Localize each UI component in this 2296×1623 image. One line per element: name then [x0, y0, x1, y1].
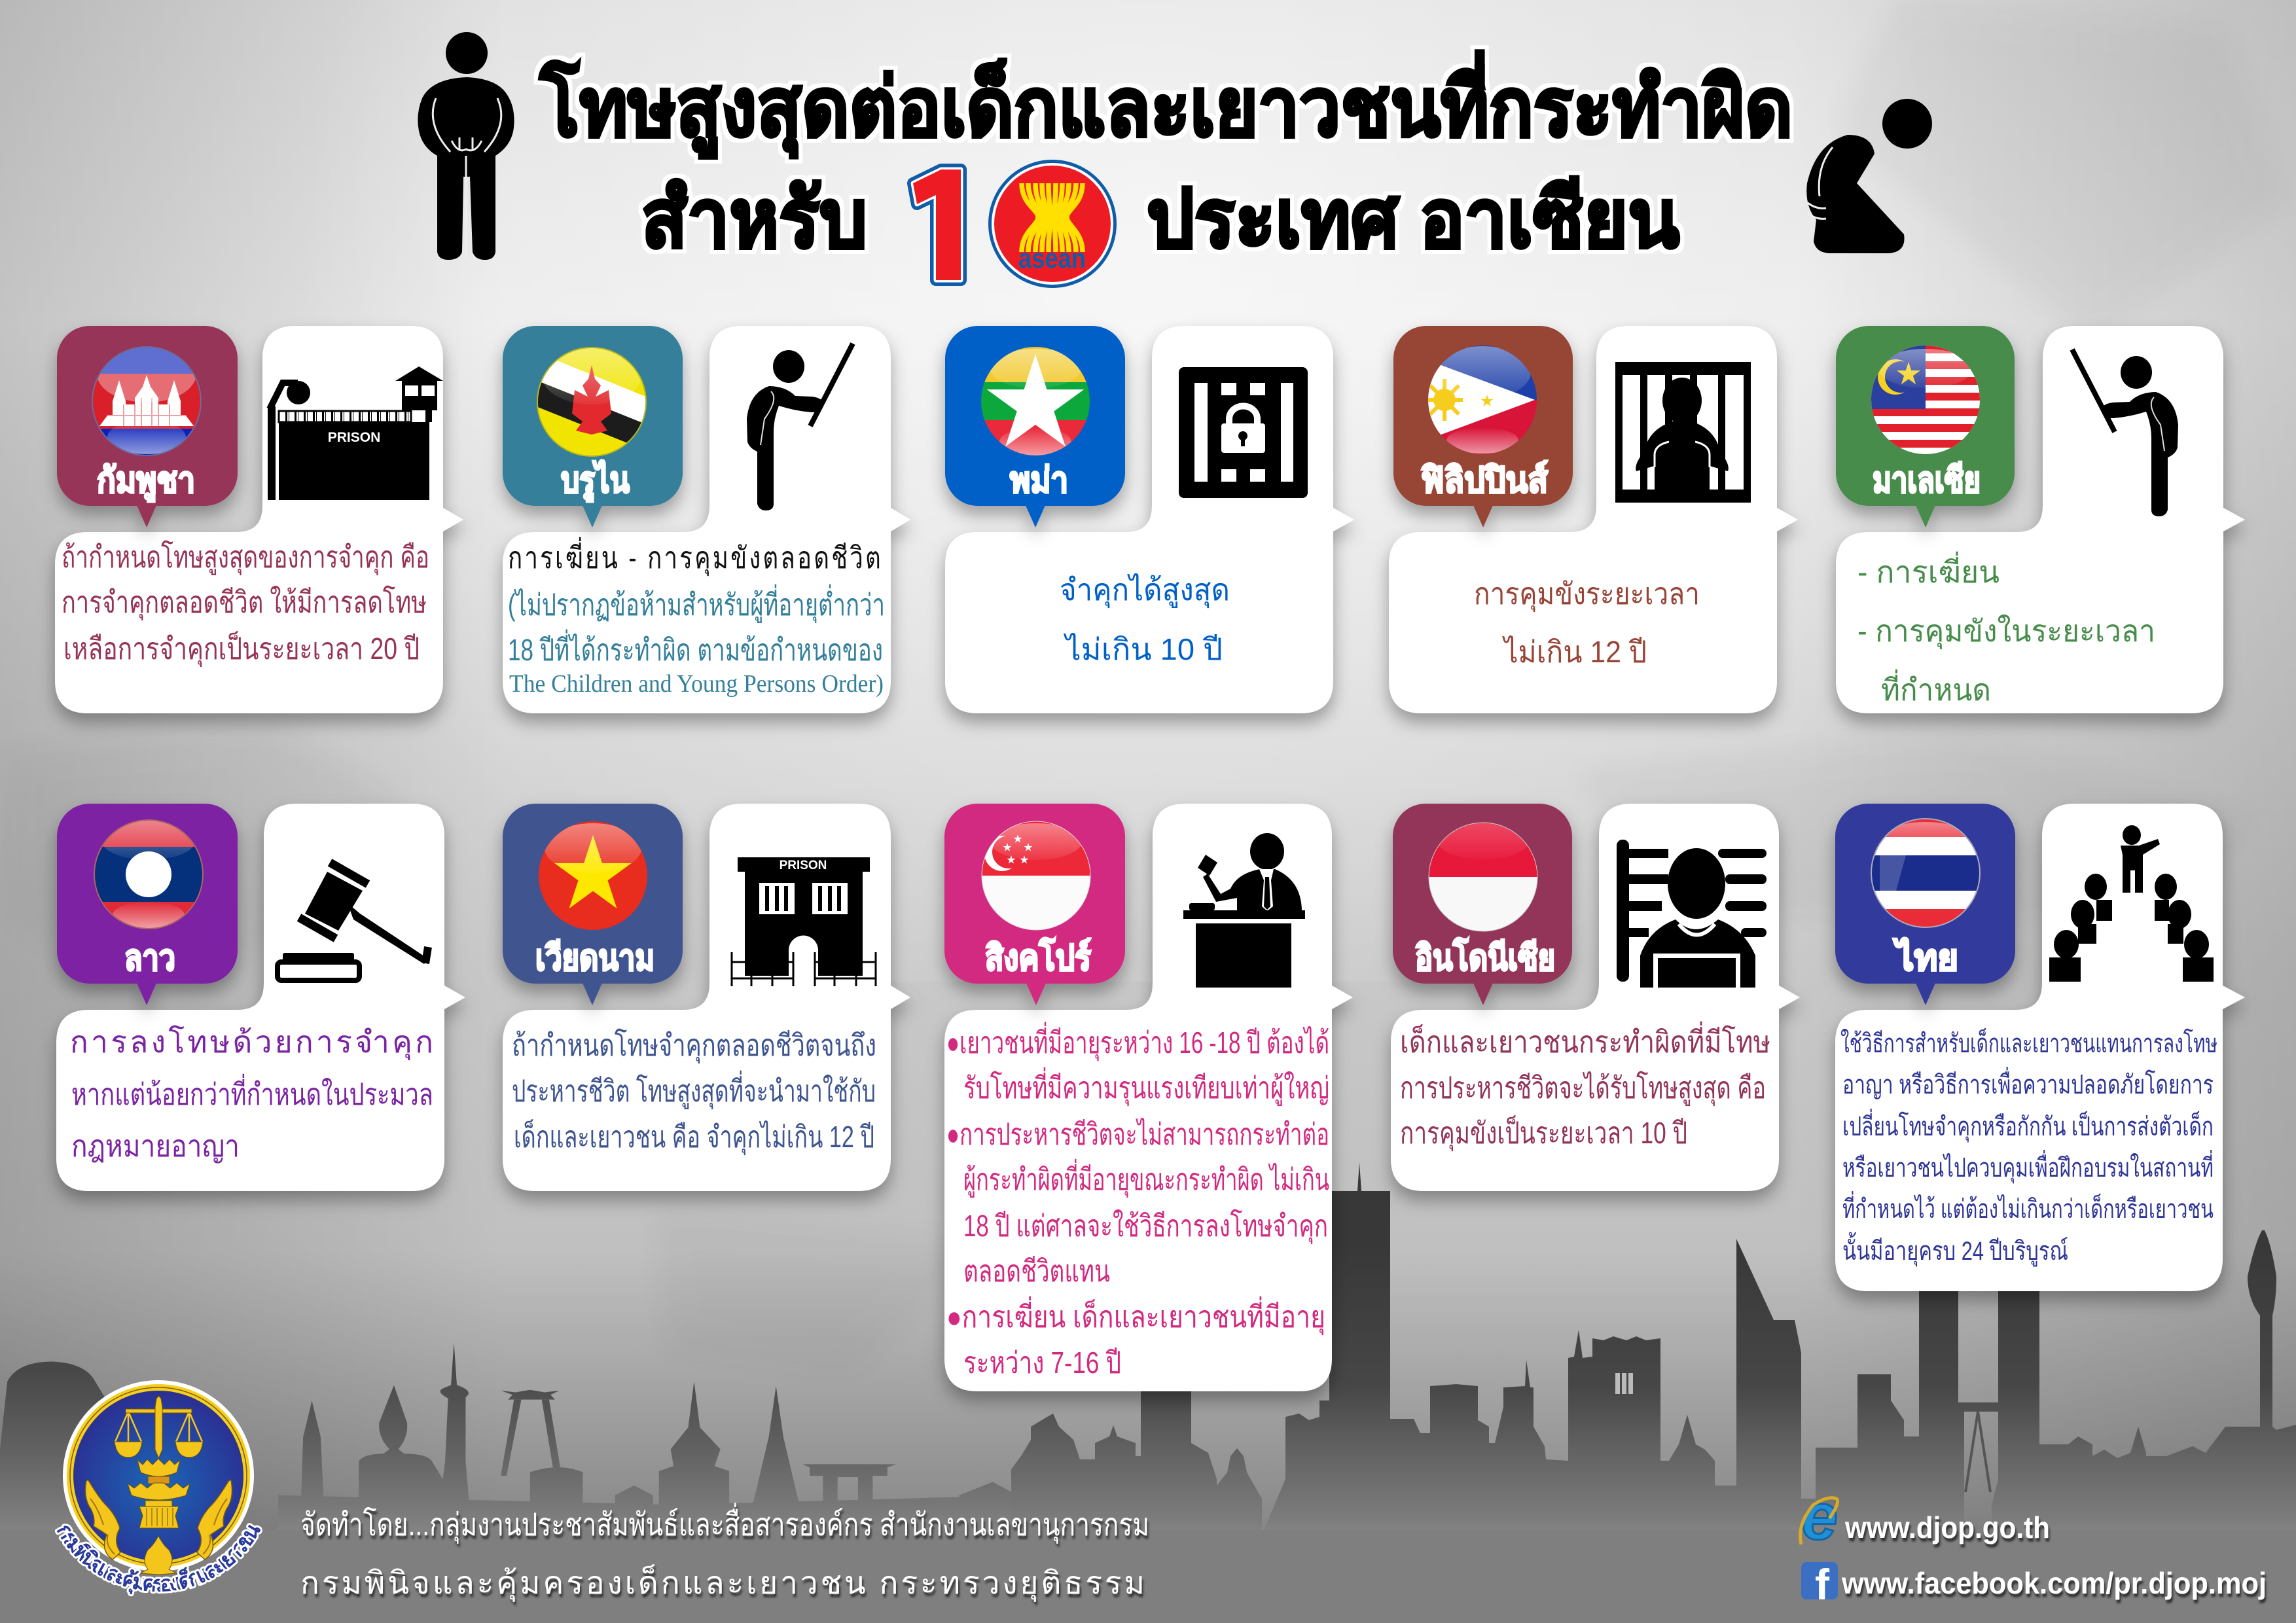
penalty text: การคุมขังระยะเวลา: [1474, 577, 1700, 613]
penalty text: เด็กและเยาวชน คือ จำคุกไม่เกิน 12 ปี: [514, 1119, 874, 1156]
icon: facebook: [1801, 1560, 1838, 1609]
title: โทษสูงสุดต่อเด็กและเยาวชนที่กระทำผิด: [539, 50, 1793, 158]
country tag: [1835, 804, 2015, 1005]
ASEAN emblem: [988, 160, 1117, 288]
icon: group with instructor: [2049, 825, 2214, 982]
title: สำหรับ: [641, 174, 867, 264]
penalty text: นั้นมีอายุครบ 24 ปีบริบูรณ์: [1842, 1232, 2068, 1267]
flag: Vietnam: [539, 821, 647, 930]
white bubble: [1391, 804, 1800, 1191]
country tag: [57, 804, 238, 1005]
panel: Cambodia: [55, 326, 463, 713]
flag: Philippines: [1424, 346, 1537, 454]
country name: กัมพูชา: [97, 461, 195, 502]
panel: Singapore: [944, 804, 1353, 1391]
penalty text: [1400, 1021, 1770, 1152]
penalty text: 18 ปี แต่ศาลจะใช้วิธีการลงโทษจำคุก: [963, 1209, 1328, 1245]
flag: Cambodia: [92, 345, 201, 455]
country name: เวียดนาม: [535, 938, 655, 978]
icon: prison wall: [268, 366, 443, 500]
penalty text: การประหารชีวิตจะได้รับโทษสูงสุด คือ: [1400, 1071, 1766, 1107]
country tag: [1393, 804, 1572, 1005]
penalty text: The Children and Young Persons Order): [509, 670, 884, 698]
penalty text: ถ้ากำหนดโทษจำคุกตลอดชีวิตจนถึง: [512, 1028, 876, 1064]
penalty text: ตลอดชีวิตแทน: [963, 1254, 1110, 1288]
department name ribbon: กรมพินิจและคุ้มครองเด็กและเยาวชน: [55, 1523, 262, 1597]
white bubble: [1836, 326, 2245, 713]
icon: web browser: e: [1801, 1480, 1838, 1554]
penalty text: [1840, 1027, 2217, 1267]
penalty text: ไม่เกิน 12 ปี: [1501, 635, 1647, 669]
footer: organization credits: กรมพินิจและคุ้มครองเด็กและเยาวชน กระทรวงยุติธรรม: [300, 1564, 1145, 1602]
icon: judge at bench: [1183, 833, 1305, 988]
country tag: [1393, 326, 1573, 527]
flag: Thailand: [1871, 819, 1980, 927]
penalty text: [62, 540, 429, 668]
panel: Thailand: [1835, 804, 2245, 1291]
footer: organization credits: จัดทำโดย...กลุ่มงานประชาสัมพันธ์และสื่อสารองค์กร สำนักงานเลขานุการกรม: [300, 1503, 1149, 1544]
icon: man with cane: [747, 344, 853, 510]
flag: Brunei: [533, 347, 651, 456]
icon: man with cane: [2072, 349, 2178, 516]
icon: gavel: [278, 863, 428, 980]
country name: มาเลเซีย: [1873, 461, 1981, 500]
icon: prison building: [732, 857, 876, 986]
penalty text: ระหว่าง 7-16 ปี: [963, 1346, 1121, 1380]
country tag: [503, 326, 683, 527]
country name: ลาว: [124, 938, 175, 978]
icon: prison building: PRISON: [780, 859, 827, 872]
white bubble: [1389, 326, 1798, 713]
flag: Laos: [94, 820, 203, 929]
penalty text: [1857, 551, 2155, 707]
penalty text: จำคุกได้สูงสุด: [1060, 573, 1230, 609]
white bubble: [56, 804, 465, 1191]
penalty text: [1474, 577, 1700, 669]
scales of justice: [115, 1396, 203, 1458]
penalty text: ไม่เกิน 10 ปี: [1063, 632, 1223, 666]
penalty text: - การเฆี่ยน: [1857, 551, 2000, 589]
country tag: [1836, 326, 2015, 527]
icon: person behind bars: [1615, 362, 1751, 503]
panel: Myanmar: [945, 326, 1354, 713]
country name: อินโดนีเซีย: [1415, 937, 1555, 978]
penalty text: กฎหมายอาญา: [71, 1129, 240, 1163]
country name: พม่า: [1010, 461, 1068, 500]
website address: www.djop.go.th: [1844, 1510, 2050, 1544]
white bubble: [55, 326, 463, 713]
penalty text: การลงโทษด้วยการจำคุก: [70, 1025, 433, 1061]
penalty text: ที่กำหนด: [1881, 669, 1991, 707]
penalty text: [512, 1028, 876, 1156]
penalty text: (ไม่ปรากฏข้อห้ามสำหรับผู้ที่อายุต่ำกว่า: [508, 584, 885, 624]
penalty text: ประหารชีวิต โทษสูงสุดที่จะนำมาใช้กับ: [512, 1070, 876, 1110]
icon: prison wall: PRISON: [328, 430, 380, 445]
white bubble: [945, 326, 1354, 713]
flag: Malaysia: [1871, 346, 1980, 454]
title: ประเทศ อาเซียน: [1147, 174, 1679, 264]
penalty text: - การคุมขังในระยะเวลา: [1857, 614, 2155, 650]
panel: Brunei: [503, 326, 910, 713]
penalty text: 18 ปีที่ได้กระทำผิด ตามข้อกำหนดของ: [508, 629, 883, 667]
penalty text: เด็กและเยาวชนกระทำผิดที่มีโทษ: [1400, 1021, 1770, 1059]
country name: สิงคโปร์: [985, 937, 1091, 978]
country name: ไทย: [1893, 937, 1958, 978]
penalty text: ●การประหารชีวิตจะไม่สามารถกระทำต่อ: [946, 1117, 1329, 1151]
naga right: [197, 1480, 232, 1560]
title: [539, 50, 1793, 264]
naga left: [86, 1480, 120, 1560]
penalty text: เหลือการจำคุกเป็นระยะเวลา 20 ปี: [63, 631, 420, 668]
penalty text: ถ้ากำหนดโทษสูงสุดของการจำคุก คือ: [62, 540, 429, 576]
country name: บรูไน: [561, 459, 630, 502]
white bubble: [503, 326, 910, 713]
white bubble: [1835, 804, 2245, 1291]
penalty text: ผู้กระทำผิดที่มีอายุขณะกระทำผิด ไม่เกิน: [963, 1158, 1329, 1198]
big number 1: [913, 169, 961, 280]
emblem: Department of Juvenile Observation and Protection: [55, 1380, 262, 1597]
country tag: [944, 804, 1125, 1005]
white bubble: [944, 804, 1353, 1391]
panel: Vietnam: [503, 804, 910, 1191]
country tag: [503, 804, 683, 1005]
panel: Malaysia: [1836, 326, 2245, 713]
icon: facebook: f: [1815, 1560, 1830, 1609]
country name: ฟิลิปปินส์: [1421, 460, 1548, 500]
panel: Laos: [56, 804, 465, 1191]
penalty text: [70, 1025, 433, 1163]
flag: Singapore: [982, 821, 1090, 930]
penalty text: [1060, 573, 1230, 666]
penalty text: ●การเฆี่ยน เด็กและเยาวชนที่มีอายุ: [946, 1296, 1325, 1336]
penalty text: การจำคุกตลอดชีวิต ให้มีการลดโทษ: [62, 585, 427, 621]
country tag: [57, 326, 238, 527]
ASEAN emblem: asean: [1018, 243, 1086, 274]
flag: Indonesia: [1429, 823, 1537, 931]
panel: Philippines: [1389, 326, 1798, 713]
icon: locked cell: [1179, 367, 1308, 498]
facebook address: www.facebook.com/pr.djop.moj: [1841, 1566, 2267, 1600]
skyline silhouette: [0, 1162, 2296, 1531]
footer: organization credits: [300, 1503, 1149, 1602]
lotus pedestal: [128, 1459, 190, 1575]
penalty text: การเฆี่ยน - การคุมขังตลอดชีวิต: [508, 537, 883, 577]
panel: Indonesia: [1391, 804, 1800, 1191]
flag: Myanmar: [981, 347, 1090, 457]
icon: standing man with clasped hands: [418, 32, 514, 260]
penalty text: [508, 537, 885, 698]
white bubble: [503, 804, 910, 1191]
country tag: [945, 326, 1125, 527]
penalty text: รับโทษที่มีความรุนแรงเทียบเท่าผู้ใหญ่: [963, 1067, 1329, 1107]
penalty text: ●เยาวชนที่มีอายุระหว่าง 16 -18 ปี ต้องได้: [946, 1022, 1329, 1061]
icon: mugshot: [1617, 840, 1767, 990]
icon: kneeling man bowing: [1806, 99, 1932, 253]
penalty text: การคุมขังเป็นระยะเวลา 10 ปี: [1400, 1115, 1687, 1152]
penalty text: [946, 1022, 1329, 1380]
penalty text: หากแต่น้อยกว่าที่กำหนดในประมวล: [71, 1073, 433, 1111]
